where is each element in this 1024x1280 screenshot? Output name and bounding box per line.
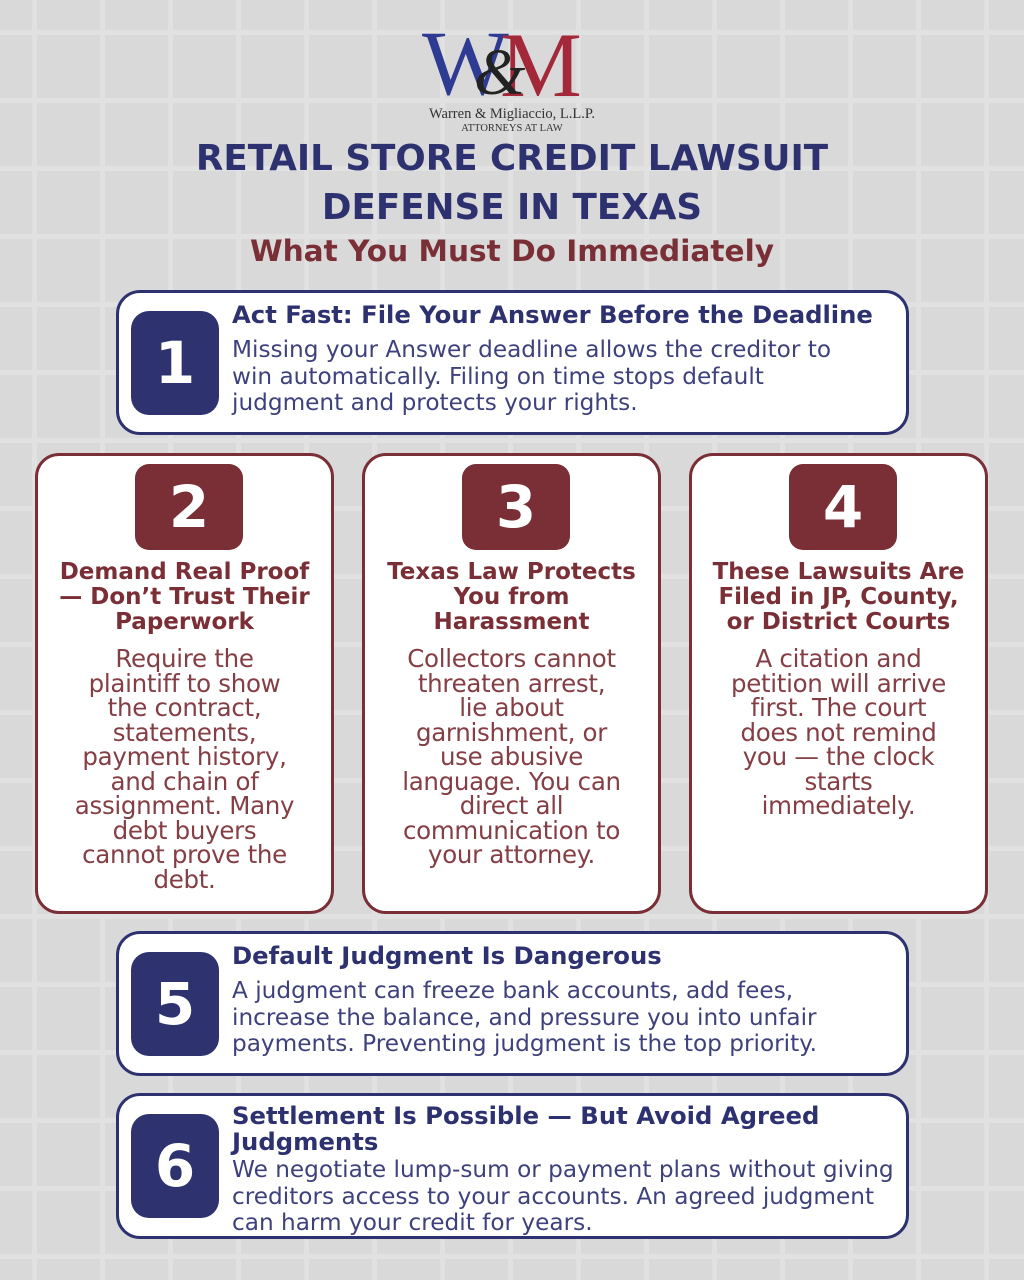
number 3: 3: [496, 473, 536, 541]
text 4: you — the clock: [743, 742, 934, 771]
number 6: [131, 1114, 219, 1218]
heading 2: Paperwork: [115, 609, 254, 635]
heading 4: These Lawsuits Are: [713, 559, 964, 585]
number 4: [789, 464, 897, 550]
text 2: the contract,: [108, 693, 261, 722]
heading 3: Texas Law Protects: [387, 559, 636, 585]
text 2: payment history,: [82, 742, 287, 771]
heading 4: [712, 559, 964, 635]
text 4: A citation and: [755, 644, 922, 673]
number 1: [131, 311, 219, 415]
text 6: [232, 1156, 894, 1236]
text 6: can harm your credit for years.: [232, 1209, 593, 1236]
heading 5: Default Judgment Is Dangerous: [232, 941, 662, 970]
number 2: [135, 464, 243, 550]
text 3: lie about: [459, 693, 564, 722]
panel: step 6: [116, 1093, 909, 1239]
panel: step 2: [35, 453, 334, 914]
text 3: use abusive: [440, 742, 583, 771]
logo: ATTORNEYS AT LAW: [461, 123, 563, 134]
text 3: language. You can: [402, 766, 621, 796]
text 5: A judgment can freeze bank accounts, add fees,: [232, 977, 793, 1004]
heading 3: You from: [454, 584, 569, 610]
text 4: does not remind: [741, 718, 936, 746]
text 1: win automatically. Filing on time stops default: [232, 362, 764, 390]
text 2: Require the: [115, 644, 254, 673]
text 5: payments. Preventing judgment is the top priority.: [232, 1030, 817, 1057]
title: RETAIL STORE CREDIT LAWSUIT: [196, 138, 828, 179]
text 2: statements,: [113, 718, 256, 746]
heading 6: Settlement Is Possible — But Avoid Agreed: [232, 1101, 819, 1130]
number 2: 2: [169, 473, 209, 541]
text 1: judgment and protects your rights.: [232, 389, 638, 416]
number 6: 6: [155, 1132, 195, 1200]
text 4: immediately.: [762, 791, 915, 820]
text 4: [731, 644, 946, 820]
text 1: Missing your Answer deadline allows the creditor to: [232, 336, 831, 363]
text 4: first. The court: [751, 693, 926, 722]
heading 2: [59, 559, 310, 635]
title: DEFENSE IN TEXAS: [322, 187, 702, 228]
text 1: [232, 336, 831, 416]
heading 6: Judgments: [232, 1127, 378, 1156]
text 6: We negotiate lump-sum or payment plans without giving: [232, 1156, 894, 1183]
text 3: direct all: [460, 791, 563, 820]
number 4: 4: [823, 473, 863, 541]
text 2: and chain of: [110, 766, 259, 796]
text 2: cannot prove the: [82, 840, 287, 869]
panel: step 4: [689, 453, 988, 914]
logo: Warren & Migliaccio, L.L.P.: [429, 106, 595, 122]
text 3: garnishment, or: [416, 718, 607, 746]
text 2: assignment. Many: [75, 791, 294, 820]
number 3: [462, 464, 570, 550]
heading 2: Demand Real Proof: [60, 559, 309, 585]
text 2: [75, 644, 294, 894]
text 3: [402, 644, 621, 869]
text 3: your attorney.: [428, 840, 595, 869]
panel: step 5: [116, 931, 909, 1076]
text 2: debt.: [153, 864, 216, 894]
text 2: plaintiff to show: [89, 668, 280, 698]
heading 3: [387, 559, 636, 635]
heading 6: [230, 1101, 819, 1156]
panel: step 1: [116, 290, 909, 435]
text 2: debt buyers: [113, 816, 256, 844]
heading 1: Act Fast: File Your Answer Before the Deadline: [232, 300, 873, 329]
heading 4: Filed in JP, County,: [718, 584, 959, 610]
text 5: [232, 977, 817, 1057]
text 3: threaten arrest,: [418, 668, 605, 698]
subtitle: What You Must Do Immediately: [250, 234, 774, 268]
panel: step 3: [362, 453, 661, 914]
number 5: [131, 952, 219, 1056]
title: [196, 138, 828, 228]
heading 3: Harassment: [434, 609, 589, 635]
text 4: starts: [804, 766, 873, 796]
text 6: creditors access to your accounts. An agreed judgment: [232, 1182, 874, 1210]
text 3: communication to: [403, 816, 620, 844]
text 5: increase the balance, and pressure you into unfair: [232, 1004, 817, 1030]
number 5: 5: [155, 970, 195, 1038]
heading 4: or District Courts: [727, 609, 950, 635]
text 4: petition will arrive: [731, 668, 946, 698]
text 3: Collectors cannot: [407, 644, 616, 673]
heading 2: — Don’t Trust Their: [59, 584, 310, 610]
number 1: 1: [155, 329, 195, 397]
logo: [422, 14, 595, 134]
